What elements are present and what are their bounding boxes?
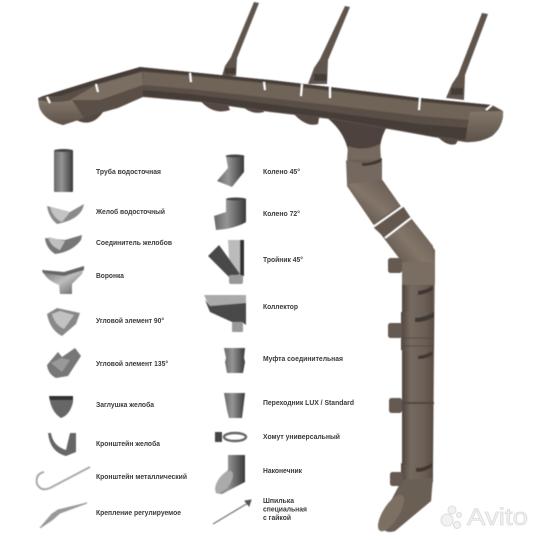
wall stubs xyxy=(388,258,403,486)
labels: middle column: с гайкой xyxy=(263,513,291,522)
icon: coupling xyxy=(224,348,245,373)
icon: outlet xyxy=(212,455,245,496)
white gaps xyxy=(373,206,411,238)
clips on gutter xyxy=(47,73,492,110)
watermark: Avito xyxy=(441,504,528,531)
labels: middle column: Наконечник xyxy=(263,466,302,475)
labels: left column xyxy=(95,167,187,517)
labels: left column: Угловой элемент 90° xyxy=(96,316,164,325)
icon: gutter connector xyxy=(45,235,82,254)
icon: adapter xyxy=(224,393,245,418)
labels: left column: Угловой элемент 135° xyxy=(96,359,168,368)
labels: left column: Крепление регулируемое xyxy=(96,508,181,517)
labels: middle column: Колено 72° xyxy=(263,209,300,218)
icon: downpipe xyxy=(54,149,73,192)
parts icons: left column xyxy=(37,149,90,528)
slanted coupling xyxy=(373,206,411,238)
icon: funnel xyxy=(42,266,84,294)
gutter face shadow band xyxy=(143,90,470,140)
vertical pipe shading xyxy=(402,285,433,470)
pipe collars xyxy=(418,286,433,295)
labels: middle column xyxy=(263,167,354,522)
end caps xyxy=(39,100,84,125)
second elbow xyxy=(385,218,435,272)
icon: corner 135 xyxy=(47,348,81,378)
downspout pipe xyxy=(322,114,435,535)
gutter rim xyxy=(40,67,492,108)
labels: middle column: Переходник LUX / Standard xyxy=(263,398,354,407)
labels: left column: Труба водосточная xyxy=(96,167,161,176)
labels: middle column: Хомут универсальный xyxy=(263,432,340,441)
icon: stud with nut xyxy=(213,500,251,524)
first elbow xyxy=(347,180,400,224)
icon: gutter xyxy=(47,204,84,224)
roof strap right xyxy=(446,13,488,100)
labels: left column: Заглушка желоба xyxy=(96,400,155,409)
pipe neck xyxy=(347,144,381,160)
icon: elbow 72 xyxy=(214,198,246,230)
labels: middle column: Тройник 45° xyxy=(263,255,303,264)
watermark: Avito: Avito xyxy=(467,504,528,531)
icon: metal bracket xyxy=(37,467,90,489)
parts icons: middle column xyxy=(204,154,251,524)
upper collar xyxy=(346,158,382,185)
labels: middle column: Шпилька xyxy=(263,496,295,505)
labels: middle column: Колено 45° xyxy=(263,167,300,176)
icon: gutter end cap xyxy=(49,396,73,418)
labels: middle column: Коллектор xyxy=(263,302,298,311)
icon: gutter bracket xyxy=(48,433,76,456)
icon: corner 90 xyxy=(47,308,80,336)
outlet elbow xyxy=(381,478,433,532)
gutter channel xyxy=(38,67,503,145)
bracket saddles under gutter xyxy=(75,98,462,145)
labels: left column: Воронка xyxy=(96,271,125,280)
roof strap middle xyxy=(308,6,350,84)
icon: collector xyxy=(204,295,246,332)
gutter face light band xyxy=(143,72,490,120)
roof strap left xyxy=(222,2,259,76)
icon: universal clamp xyxy=(215,432,246,442)
icon: elbow 45 xyxy=(217,154,244,187)
labels: middle column: специальная xyxy=(263,504,307,514)
icon: tee 45 xyxy=(208,240,244,284)
elbow band xyxy=(402,262,435,287)
labels: left column: Соединитель желобов xyxy=(96,238,172,247)
labels: left column: Кронштейн металлический xyxy=(96,472,187,481)
icon: adjustable mount xyxy=(40,503,87,528)
labels: left column: Кронштейн желоба xyxy=(96,439,161,448)
labels: left column: Желоб водосточный xyxy=(95,207,165,216)
T outlet shading xyxy=(322,114,397,153)
labels: middle column: Муфта соединительная xyxy=(263,354,343,363)
